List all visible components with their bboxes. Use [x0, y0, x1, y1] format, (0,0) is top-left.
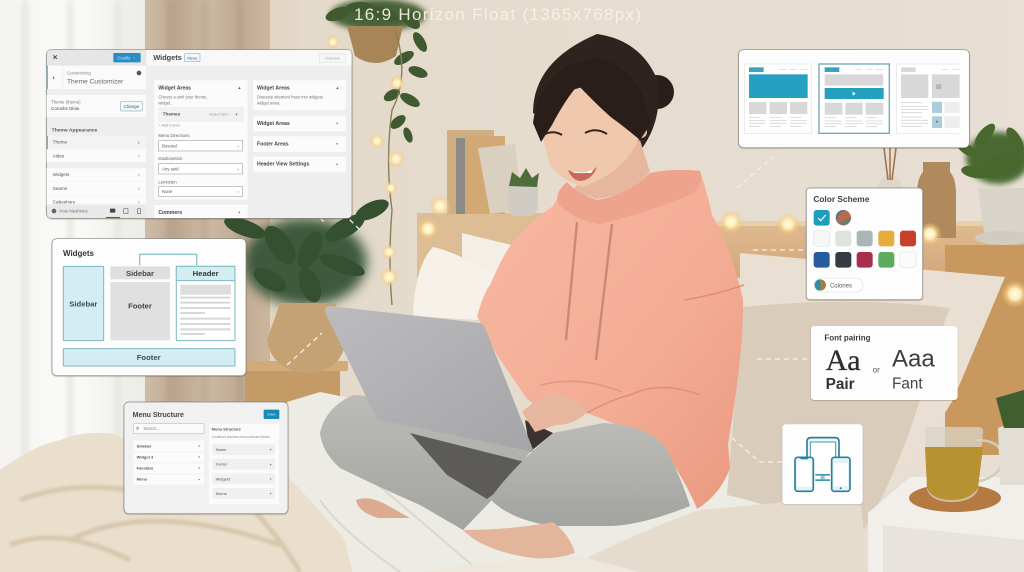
phone icon right: [832, 457, 850, 491]
structure list: Menu Structure: [212, 427, 242, 432]
active theme: Theme (theme): [51, 100, 81, 105]
structure list: ▾: [270, 477, 272, 481]
hands: [522, 394, 587, 432]
header column: [176, 266, 235, 341]
accordion column: Widget Areas: [257, 85, 290, 91]
accordion column: ▾: [336, 142, 338, 146]
widget areas column: Dasbosetion: [158, 156, 183, 161]
menu list: Widget 3: [137, 454, 154, 459]
laptop: [325, 306, 553, 452]
woman: [320, 34, 744, 558]
panel: font pairing: Pair: [826, 376, 855, 393]
panel: font pairing: Font pairing: [824, 333, 871, 342]
connector bracket: [140, 254, 197, 265]
bed and pillows: [287, 233, 1005, 572]
accordion column: Header View Settings: [257, 162, 309, 168]
panel heading: Outfeels: [325, 55, 340, 60]
widget areas column: None: [162, 189, 173, 194]
panel: widgets layout: [52, 239, 246, 376]
front foot: [463, 522, 575, 558]
menu list: ▾: [198, 444, 200, 448]
widget areas column: Any settl: [162, 166, 179, 171]
structure list: Footer: [216, 462, 228, 467]
blanket: [0, 433, 352, 572]
middle column: [110, 266, 170, 340]
menu list: ▾: [198, 466, 200, 470]
neck: [573, 140, 650, 199]
menu rows: Aides: [53, 153, 65, 158]
panel: responsive devices: [782, 424, 863, 504]
widget areas column: Chesss a smit your theme,: [158, 94, 208, 99]
menu list: [133, 441, 204, 485]
menu rows: ›: [138, 139, 140, 146]
left foot: [356, 498, 410, 518]
menu rows: ›: [138, 199, 140, 206]
customizer header: Theme Customizer: [67, 79, 124, 86]
search: ⚲: [136, 426, 139, 431]
panel: font pairing: Aaa: [892, 346, 935, 373]
accordion column: Diseaste sitement hsas mtx widgets: [257, 94, 323, 99]
title: 16:9 Horizon Float (1365x768px): [354, 5, 641, 24]
menu rows: [47, 136, 146, 206]
hoodie: [477, 170, 743, 509]
panel: font pairing: Aa: [826, 344, 861, 377]
accordion column: ▾: [336, 122, 338, 126]
footer block: Footer: [137, 353, 161, 362]
footer bar: [47, 204, 146, 218]
middle column: Sidebar: [126, 269, 154, 278]
panel: font pairing: or: [873, 365, 880, 374]
widget areas column: ⌄: [237, 166, 240, 171]
menu rows: ›: [138, 172, 140, 179]
swatch rows: [814, 231, 916, 268]
search: [133, 424, 204, 434]
structure list: Morns: [216, 491, 227, 496]
structure list: Construct ancross menu subose blocks: [212, 435, 270, 439]
structure list: ▾: [270, 492, 272, 496]
right side decor: [868, 120, 1024, 572]
panel: menu structure: [124, 402, 288, 514]
menu list: Sidebar: [137, 443, 152, 448]
sidebar block: [63, 266, 104, 341]
accordion column: [253, 80, 346, 172]
right leg: [490, 423, 690, 526]
template 2 selected: [819, 64, 889, 133]
hanging plant: [324, 0, 430, 305]
menu list: Menu: [137, 477, 148, 482]
template 3: [897, 64, 960, 133]
structure list: Name: [216, 447, 227, 452]
panel heading: Mene: [187, 55, 198, 60]
panel: menu structure: Menu Structure: [133, 412, 184, 419]
panel: layout templates: [739, 50, 969, 148]
menu rows: Seams: [53, 186, 68, 191]
potted plant on side table: [222, 195, 392, 405]
colories chip: Colories: [830, 283, 852, 289]
phone icon left: [795, 457, 813, 491]
menu rows: Theme: [53, 140, 68, 145]
fairy lights: [326, 35, 1024, 308]
widget areas column: ⌄: [237, 189, 240, 194]
face: [540, 85, 640, 187]
footer block: [63, 349, 235, 366]
menu list: ▾: [198, 477, 200, 481]
dashed connectors: [287, 157, 811, 462]
template 1: [744, 64, 812, 133]
panel heading: [153, 53, 345, 62]
widget areas column: Themes: [163, 112, 181, 117]
active theme: [47, 95, 146, 117]
tablet icon: [807, 438, 839, 457]
selected swatch: [814, 210, 830, 226]
menu rows: ›: [138, 185, 140, 192]
widget areas column: + Add Iconrs: [158, 124, 180, 128]
save button: Save: [267, 413, 275, 417]
accordion column: widget anea.: [257, 100, 281, 105]
widget areas column: Lexxisten: [158, 179, 177, 184]
customizer header: ‹: [53, 75, 55, 82]
accordion column: Widget Areas: [257, 121, 290, 127]
widget areas column: ⌄: [237, 143, 240, 148]
active theme: Change: [123, 104, 140, 109]
footer bar: How Mashions: [59, 209, 88, 214]
panel: theme customizer: Theme Appearance: [52, 127, 98, 133]
books: [447, 130, 539, 216]
middle column: Footer: [128, 302, 152, 311]
accordion column: ▾: [336, 162, 338, 166]
panel: theme customizer: [47, 50, 352, 218]
menu rows: Cabeshors: [53, 199, 76, 204]
publish button: [113, 53, 141, 62]
menu rows: ›: [138, 153, 140, 160]
panel: color scheme: [806, 188, 923, 300]
heading: Widgets: [63, 249, 95, 258]
panel: font pairing: Fant: [892, 375, 923, 392]
header column: Header: [193, 269, 219, 278]
widget areas column: [154, 80, 248, 218]
sidebar block: Sidebar: [69, 299, 97, 308]
customizer header: Customizing: [67, 70, 91, 75]
accordion column: ▴: [336, 85, 338, 90]
panel: color scheme: Color Scheme: [813, 194, 870, 204]
fringe: [533, 58, 650, 142]
publish button: ›: [133, 55, 135, 60]
widget areas column: ▾: [238, 211, 240, 215]
widget areas column: ▾: [236, 112, 238, 116]
widget areas column: Select item: [209, 112, 229, 117]
structure list: [209, 424, 279, 504]
menu list: ▾: [198, 455, 200, 459]
link bar: [815, 474, 830, 481]
panel heading: Widgets: [153, 53, 182, 62]
publish button: Dusifie: [117, 55, 131, 60]
menu rows: Widgets: [53, 172, 70, 177]
search: Search...: [143, 426, 160, 431]
left leg: [320, 395, 540, 530]
active theme: Coroshs Glow: [51, 106, 80, 111]
gradient swatch: [836, 210, 851, 225]
menu list: Fanctars: [137, 465, 154, 470]
structure list: ▾: [270, 462, 272, 466]
accordion column: Footer Areas: [257, 141, 289, 147]
bun and back hair: [533, 34, 674, 157]
save button: [264, 410, 279, 419]
widget areas column: Menu Directions: [158, 133, 190, 138]
panel: theme customizer: ✕: [52, 55, 58, 62]
widget areas column: Widget Areas: [158, 85, 191, 91]
structure list: ▾: [270, 448, 272, 452]
widget areas column: ▴: [238, 85, 241, 90]
widget areas column: Commers: [158, 210, 182, 216]
widget areas column: Bosoral: [162, 143, 177, 148]
panel: font pairing: [811, 326, 958, 400]
customizer header: [47, 66, 146, 89]
structure list: Widget3: [216, 476, 231, 481]
widget areas column: widget.: [158, 100, 171, 105]
